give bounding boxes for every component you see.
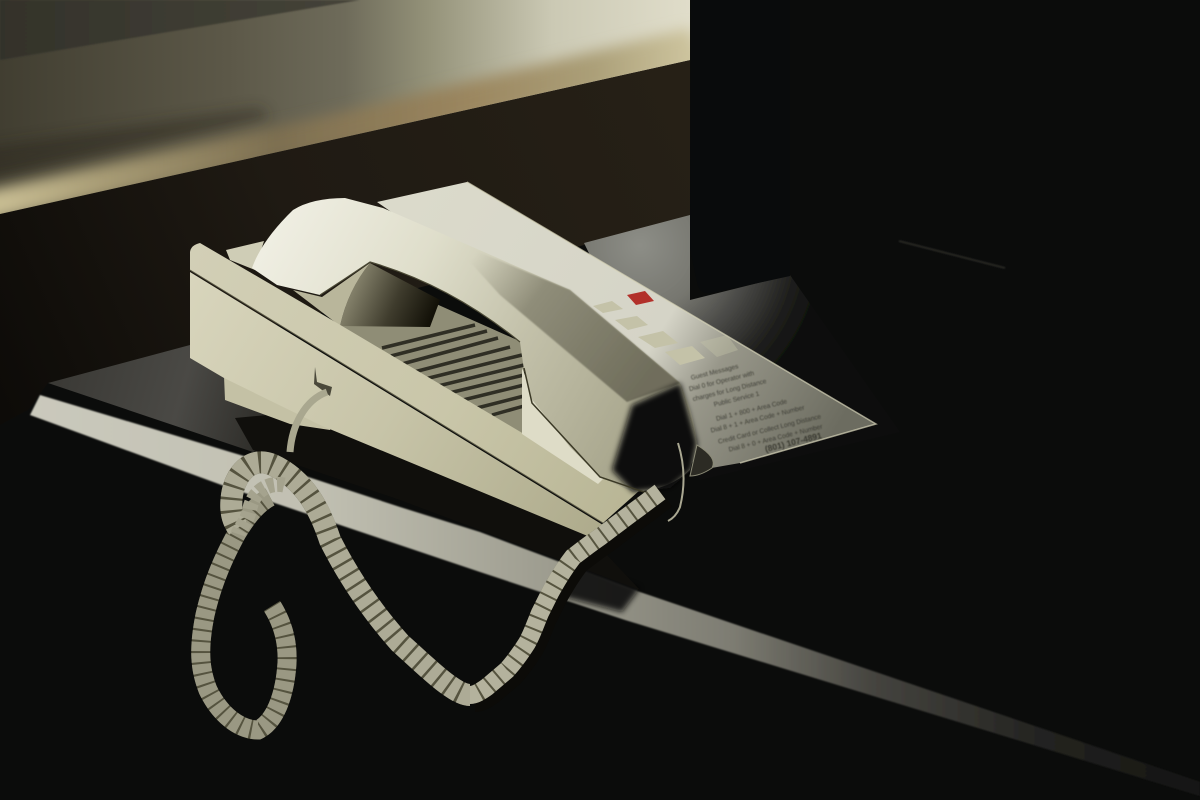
arch underside line bbox=[320, 262, 520, 342]
base front panel bbox=[190, 272, 603, 537]
speaker grille bbox=[382, 325, 524, 415]
top shadow panel bbox=[0, 0, 360, 60]
lower wall bbox=[0, 60, 690, 425]
cavity under handset bbox=[340, 263, 440, 327]
coiled cord bbox=[201, 462, 665, 730]
rear cradle bbox=[226, 241, 264, 270]
handset wire bbox=[290, 392, 327, 452]
faint streak on desk bbox=[899, 241, 1005, 268]
desk surface lit left bbox=[48, 345, 310, 452]
handset neck bbox=[293, 263, 370, 326]
red button bbox=[627, 291, 654, 305]
right strand bbox=[470, 492, 660, 695]
wall shadow bbox=[0, 108, 270, 178]
cradle lit strip bbox=[522, 368, 612, 484]
handset dark end bbox=[612, 383, 697, 492]
printed card text: (801) 107-4891 bbox=[764, 430, 823, 454]
phone foot bbox=[224, 376, 340, 430]
keypad buttons bbox=[593, 301, 738, 365]
card bright rim bbox=[467, 182, 876, 463]
shadow under telephone bbox=[235, 412, 640, 590]
thin wire right bbox=[668, 443, 684, 521]
monitor silhouette bbox=[690, 0, 790, 293]
upper wall panel bbox=[0, 0, 690, 220]
telephone bbox=[190, 198, 713, 537]
handset shaded top bbox=[450, 240, 680, 402]
cord small loop bbox=[238, 484, 284, 534]
printed card text: Dial 8 + 1 + Area Code + Number bbox=[710, 404, 806, 435]
printed card text bbox=[688, 363, 824, 454]
base top face bbox=[340, 303, 524, 436]
cord shadow on desk edge bbox=[560, 560, 640, 612]
right base curve bbox=[690, 445, 713, 476]
handset bbox=[252, 198, 697, 492]
printed card text: Public Service 1 bbox=[713, 390, 760, 409]
printed card text: charges for Long Distance bbox=[692, 378, 768, 403]
base upper strip bbox=[190, 243, 640, 523]
printed card text: Credit Card or Collect Long Distance bbox=[717, 413, 822, 446]
printed card text: Dial 8 + 0 + Area Code + Number bbox=[728, 423, 824, 454]
main strand bbox=[231, 462, 470, 695]
cord mount bbox=[314, 367, 332, 396]
upper wall with light band bbox=[0, 0, 710, 224]
desk edge highlight bbox=[30, 395, 1200, 796]
instruction card bbox=[377, 182, 876, 470]
desk surface lit right bbox=[584, 215, 810, 364]
printed card text: Dial 1 + 800 + Area Code bbox=[715, 398, 788, 423]
printed card text: Dial 0 for Operator with bbox=[688, 370, 755, 393]
light band bbox=[0, 28, 710, 224]
lower loop strand bbox=[201, 497, 287, 730]
handset seam bbox=[524, 368, 650, 494]
base crease line bbox=[190, 270, 603, 523]
right strand shadow bbox=[475, 497, 665, 700]
printed card text: Guest Messages bbox=[690, 363, 740, 382]
